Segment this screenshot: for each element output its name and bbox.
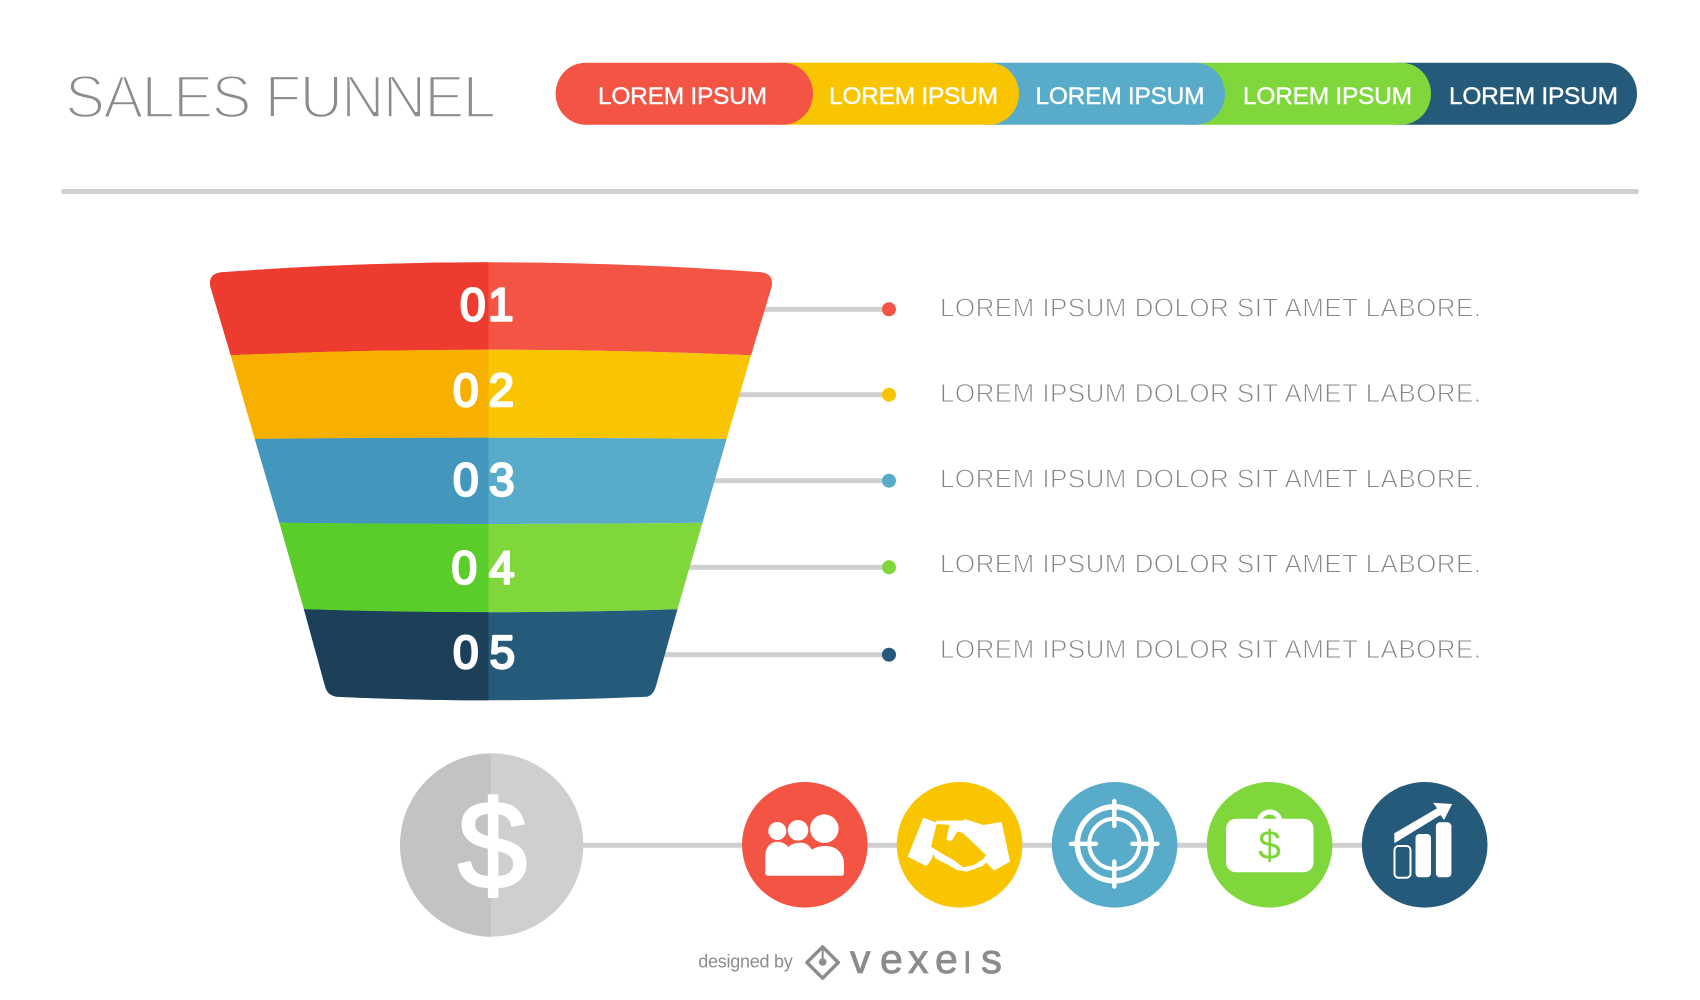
funnel: [210, 262, 772, 700]
funnel band 01: [210, 262, 772, 355]
icon: money case: $: [1258, 822, 1281, 868]
funnel band 05: 05: [453, 626, 515, 678]
pill: yellow: [750, 63, 1019, 125]
credit: designed by vexels: l: [964, 947, 971, 980]
pill: navy: [1368, 63, 1637, 125]
icon: gray dollar coin: [400, 753, 583, 937]
funnel band 01: 01: [460, 278, 514, 330]
icon: vexels diamond: [807, 947, 838, 978]
pill: red: LOREM IPSUM: [598, 83, 767, 110]
credit: designed by vexels: vexe: [850, 936, 958, 982]
credit: designed by vexels: [698, 935, 1002, 982]
funnel descriptions: LOREM IPSUM DOLOR SIT AMET LABORE.: [940, 378, 1481, 408]
legend pills: [556, 63, 1637, 125]
credit: designed by vexels: designed by: [698, 951, 793, 971]
funnel band 04: 04: [452, 541, 515, 593]
title: SALES FUNNEL: [65, 63, 496, 130]
funnel band 02: [231, 350, 751, 439]
icon: money case: [1207, 782, 1332, 908]
icon: target: [1052, 782, 1177, 908]
funnel descriptions: LOREM IPSUM DOLOR SIT AMET LABORE.: [940, 634, 1481, 664]
funnel band 05: [304, 609, 678, 700]
funnel descriptions: [940, 293, 1481, 664]
funnel band 03: [255, 438, 727, 524]
pill: red: [556, 63, 813, 125]
icon: people: [742, 782, 868, 908]
funnel descriptions: LOREM IPSUM DOLOR SIT AMET LABORE.: [940, 293, 1481, 323]
pill: green: [1162, 63, 1431, 125]
funnel band 02: 02: [453, 364, 514, 416]
funnel band 04: [279, 523, 702, 612]
credit: designed by vexels: s: [981, 935, 1002, 982]
icon: gray dollar coin: $: [458, 777, 527, 915]
pill: navy: LOREM IPSUM: [1449, 83, 1618, 110]
funnel descriptions: LOREM IPSUM DOLOR SIT AMET LABORE.: [940, 549, 1481, 579]
funnel band 03: 03: [453, 454, 515, 506]
icon: growth chart: [1362, 782, 1487, 908]
pill: green: LOREM IPSUM: [1243, 83, 1412, 110]
pill: blue: LOREM IPSUM: [1036, 83, 1204, 110]
funnel descriptions: LOREM IPSUM DOLOR SIT AMET LABORE.: [940, 463, 1481, 493]
icon: handshake: [897, 782, 1022, 908]
connector lines and dots: [600, 302, 896, 662]
pill: yellow: LOREM IPSUM: [829, 83, 998, 110]
pill: blue: [956, 63, 1225, 125]
